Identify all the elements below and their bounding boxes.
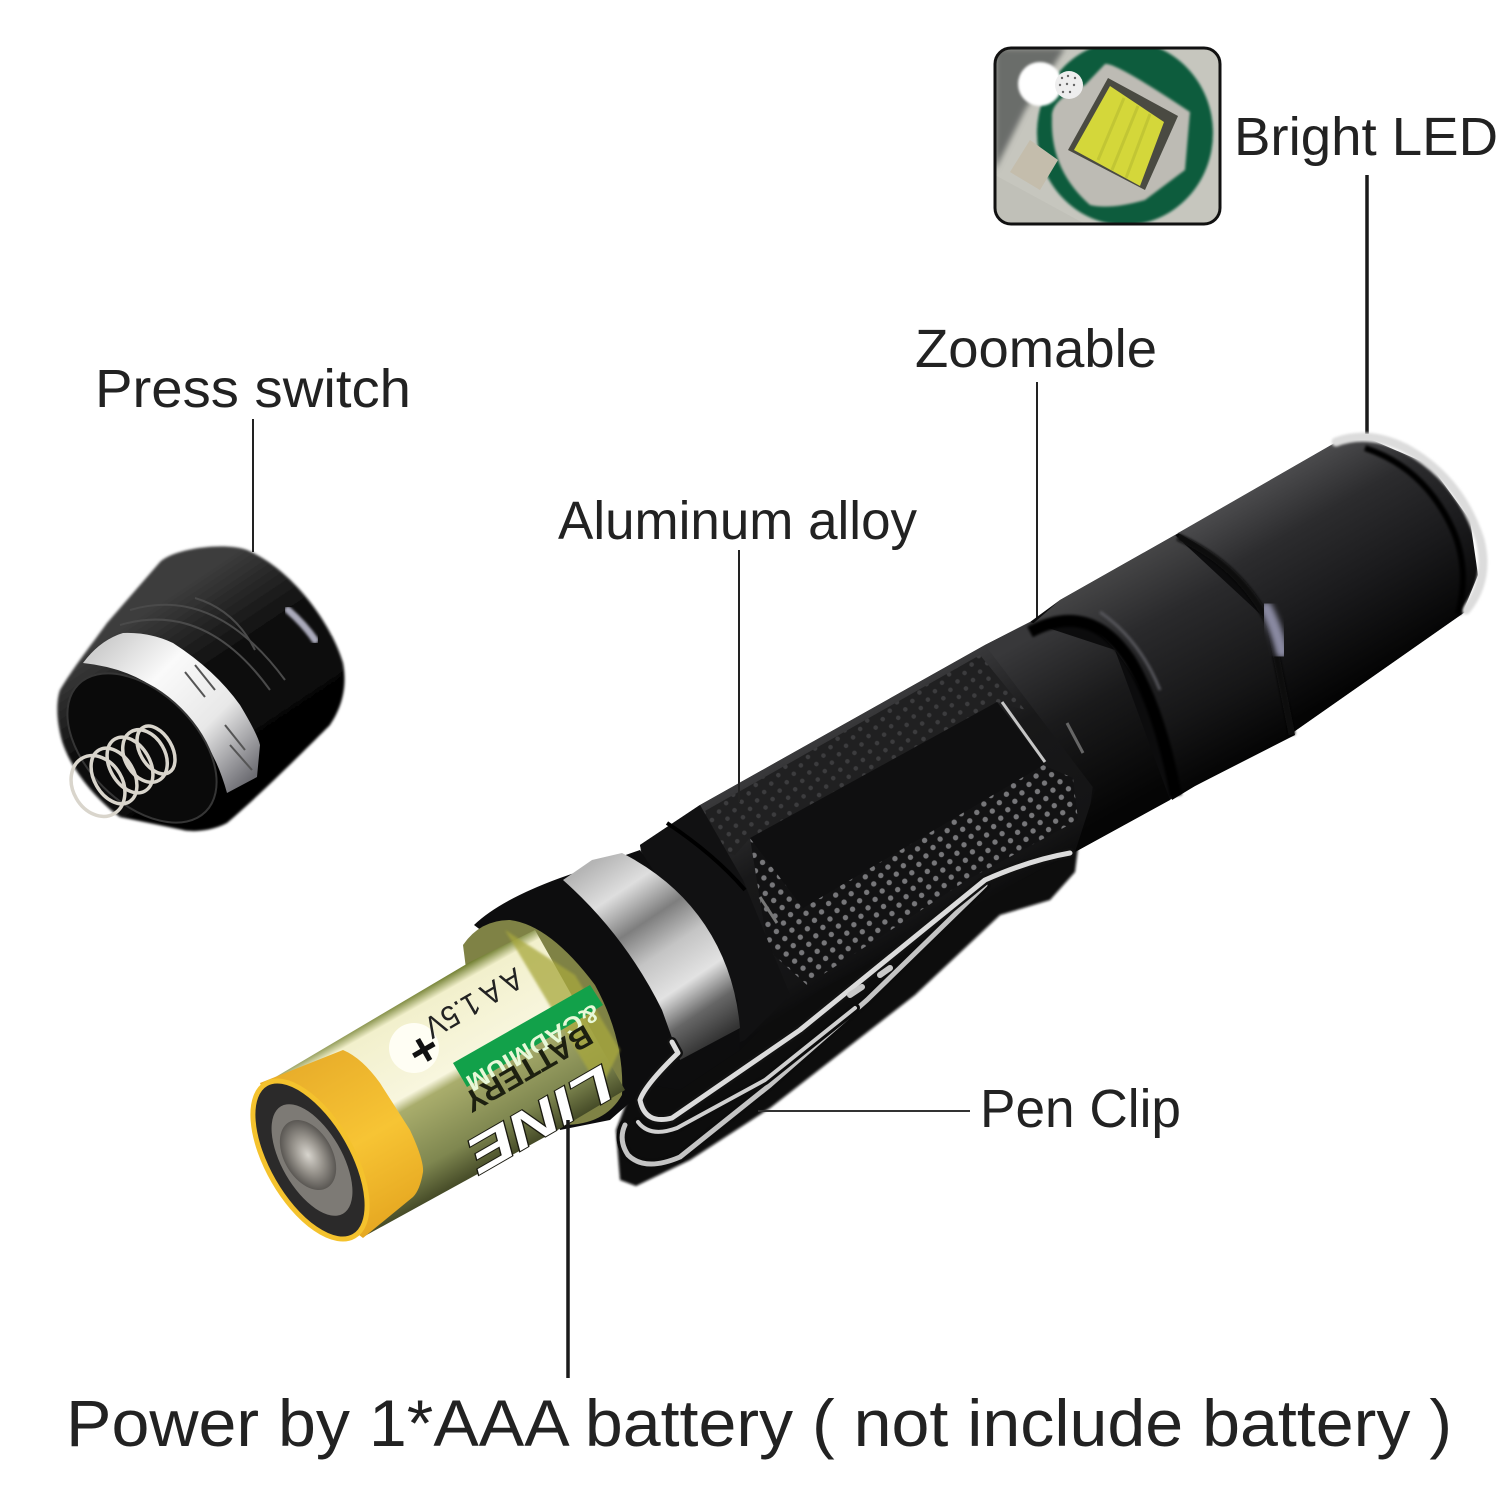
voltage text: A A 1.5V bbox=[418, 961, 529, 1045]
inset photo: LED close-up bbox=[995, 41, 1220, 225]
knurled grip barrel bbox=[640, 645, 1095, 1060]
clip lower strand shadow bbox=[622, 885, 985, 1164]
lower knurling bbox=[750, 765, 1078, 985]
clip middle strand bbox=[638, 1008, 855, 1132]
green cadmium strip bbox=[453, 985, 603, 1087]
negative terminal rings bbox=[255, 1091, 369, 1229]
leader line: Press switch bbox=[252, 419, 254, 552]
zoom ring edge highlight bbox=[1100, 612, 1160, 690]
pen clip shadow bbox=[616, 848, 1078, 1186]
cadmium label: &CADMIUM bbox=[461, 998, 604, 1096]
negative terminal button bbox=[268, 1110, 348, 1200]
cap face bbox=[39, 645, 245, 851]
silver bezel rim bbox=[1336, 437, 1483, 610]
clip front strand shadow bbox=[640, 853, 1070, 1120]
pen clip bbox=[622, 853, 1070, 1164]
caption: battery note: Power by 1*AAA battery ( not include battery ) bbox=[66, 1386, 1452, 1460]
plus sign: + bbox=[398, 1019, 449, 1079]
switch cap ribs bbox=[120, 598, 285, 690]
zoom ring bbox=[1028, 535, 1295, 800]
battery barrel bbox=[262, 930, 625, 1237]
flat panel bbox=[750, 702, 1045, 908]
spring bbox=[60, 719, 183, 826]
battery compartment interior bbox=[463, 920, 622, 1125]
leader line: battery bbox=[566, 1120, 570, 1378]
zoom ring front edge bbox=[1030, 621, 1176, 796]
brand label: LINE bbox=[456, 1054, 624, 1184]
label: Bright LED: Bright LED bbox=[1234, 107, 1498, 167]
label: Press switch: Press switch bbox=[95, 359, 411, 419]
battery label: BATTERY bbox=[458, 1018, 598, 1118]
flashlight body bbox=[463, 437, 1483, 1186]
battery bbox=[230, 930, 625, 1257]
groove highlight bbox=[1266, 608, 1282, 652]
clip front strand bbox=[640, 853, 1070, 1120]
silver band bbox=[563, 853, 740, 1060]
collar groove highlight bbox=[760, 897, 777, 923]
thread lines bbox=[185, 665, 252, 770]
second highlight bbox=[1067, 723, 1083, 753]
press switch end cap bbox=[39, 546, 345, 851]
collar groove bbox=[667, 823, 745, 890]
neck section bbox=[985, 622, 1170, 852]
upper knurling bbox=[682, 655, 1025, 855]
label: Pen Clip: Pen Clip bbox=[980, 1079, 1181, 1139]
clip dots bbox=[850, 968, 890, 995]
yellow cap band bbox=[260, 1050, 423, 1238]
label: Zoomable: Zoomable bbox=[915, 319, 1157, 379]
leader line: Bright LED bbox=[1365, 175, 1369, 434]
plus marker bbox=[389, 1023, 439, 1073]
groove between ring and head bbox=[1178, 537, 1292, 735]
leader line: Zoomable bbox=[1036, 382, 1038, 622]
body silhouette bbox=[640, 440, 1465, 1090]
head barrel bbox=[1178, 440, 1478, 738]
collar bbox=[640, 805, 790, 1060]
threaded silver band bbox=[83, 633, 260, 793]
bezel inner shadow bbox=[1365, 448, 1463, 614]
battery end glow near tube bbox=[505, 930, 620, 1090]
label: Aluminum alloy: Aluminum alloy bbox=[558, 491, 917, 551]
switch cap highlight bbox=[288, 610, 315, 640]
clip middle strand shadow bbox=[638, 1008, 855, 1132]
switch cap silhouette bbox=[57, 546, 345, 831]
clip lower strand bbox=[622, 885, 985, 1164]
battery end face bbox=[230, 1063, 390, 1257]
leader line: Pen Clip bbox=[758, 1110, 970, 1112]
leader line: Aluminum alloy bbox=[738, 550, 740, 802]
battery tube collar bbox=[474, 850, 740, 1130]
panel highlight bbox=[1002, 702, 1045, 762]
